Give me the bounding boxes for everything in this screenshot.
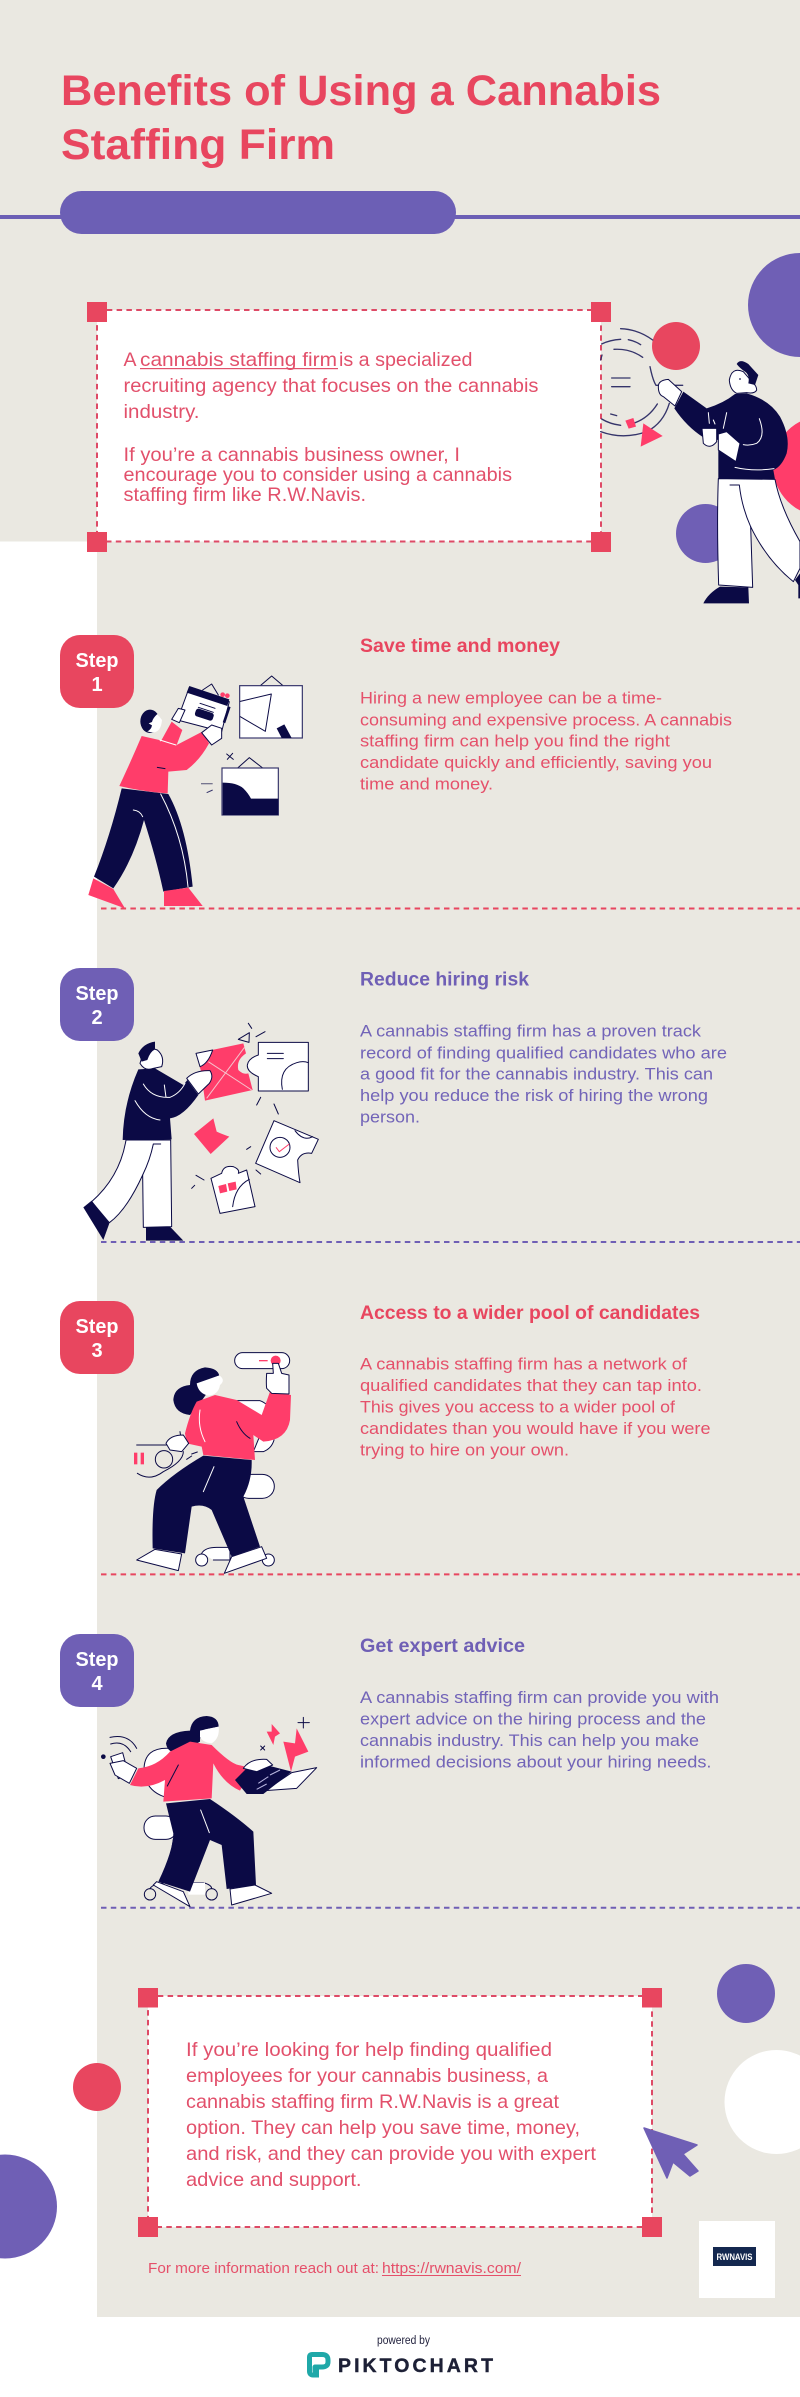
title xyxy=(61,67,661,169)
step 4 xyxy=(60,1634,719,1771)
step 1 badge: Step xyxy=(76,650,118,672)
step 1 xyxy=(60,635,732,793)
step 1 heading: Save time and money xyxy=(360,636,560,657)
step 2 body: a good fit for the cannabis industry. This can xyxy=(360,1064,713,1083)
icon: Piktochart mark xyxy=(310,2354,328,2375)
cup xyxy=(702,428,717,446)
illustration: man with puzzle pieces xyxy=(83,1023,318,1241)
step 2 body: help you reduce the risk of hiring the wrong xyxy=(360,1086,708,1105)
pants xyxy=(92,1140,172,1227)
step 3 badge: Step xyxy=(76,1316,118,1338)
phone hand xyxy=(110,1761,137,1783)
conclusion text: employees for your cannabis business, a xyxy=(186,2065,548,2087)
slider button xyxy=(235,1353,290,1369)
sweater xyxy=(674,392,788,479)
sweater xyxy=(123,1068,198,1140)
step 2 body: A cannabis staffing firm has a proven track xyxy=(360,1022,702,1040)
decorative circles: top right xyxy=(652,253,800,563)
logo: Piktochart: PIKTOCHART xyxy=(338,2355,493,2377)
footer contact line: https://rwnavis.com/ xyxy=(382,2260,522,2277)
footer contact line xyxy=(148,2260,522,2277)
desk and loop xyxy=(134,1432,197,1477)
step 2 badge xyxy=(60,968,134,1041)
step 1 body: consuming and expensive process. A cannabis xyxy=(360,710,732,729)
window held xyxy=(203,684,218,695)
step 2 body: person. xyxy=(360,1107,420,1126)
step 4 body: informed decisions about your hiring needs. xyxy=(360,1752,712,1771)
step 2 body: record of finding qualified candidates who are xyxy=(360,1043,727,1062)
chair xyxy=(196,1401,274,1566)
step 3 badge xyxy=(60,1301,134,1374)
step 4 body xyxy=(360,1688,719,1771)
step 1 badge xyxy=(60,635,134,708)
intro text: staffing firm like R.W.Navis. xyxy=(124,484,366,506)
laptop xyxy=(235,1759,317,1794)
head xyxy=(140,710,160,733)
panel: intro box xyxy=(87,302,611,552)
step 4 heading: Get expert advice xyxy=(360,1636,525,1657)
step 2 body xyxy=(360,1022,727,1126)
shoes xyxy=(88,878,125,908)
shoes xyxy=(703,587,749,603)
sweater xyxy=(119,722,209,793)
pants xyxy=(94,788,193,892)
step 4 badge: 4 xyxy=(91,1673,103,1695)
step 3 badge: 3 xyxy=(91,1340,103,1362)
icon: cursor arrow xyxy=(644,2128,698,2178)
step 3 heading: Access to a wider pool of candidates xyxy=(360,1303,700,1324)
step 1 body: time and money. xyxy=(360,774,493,793)
chair xyxy=(144,1748,217,1900)
trousers xyxy=(718,479,800,587)
intro text xyxy=(124,349,539,506)
step 1 badge: 1 xyxy=(91,674,103,696)
hand xyxy=(187,1071,212,1094)
title: Benefits of Using a Cannabis xyxy=(61,67,661,115)
hands xyxy=(202,725,222,745)
intro text: cannabis staffing firm xyxy=(140,349,337,371)
lightning and marks xyxy=(283,1728,308,1772)
pants xyxy=(158,1799,256,1892)
intro text: A xyxy=(124,349,137,371)
hands xyxy=(718,432,740,462)
step 1 body: staffing firm can help you find the right xyxy=(360,732,670,750)
face xyxy=(197,1375,223,1396)
powered by label: powered by xyxy=(377,2335,430,2347)
step 3 body: A cannabis staffing firm has a network of xyxy=(360,1354,687,1373)
conclusion text: and risk, and they can provide you with expert xyxy=(186,2143,597,2165)
conclusion text: If you’re looking for help finding qualified xyxy=(186,2039,552,2061)
diagram arcs xyxy=(601,329,683,436)
step 3 body: qualified candidates that they can tap into. xyxy=(360,1376,702,1395)
illustration: woman with phone and laptop xyxy=(101,1716,317,1907)
step 3 body: candidates than you would have if you were xyxy=(360,1419,710,1438)
step 1 body xyxy=(360,688,732,793)
conclusion text: cannabis staffing firm R.W.Navis is a great xyxy=(186,2091,560,2113)
intro text: If you’re a cannabis business owner, I xyxy=(124,444,460,466)
step 2 xyxy=(60,968,727,1126)
step 4 body: cannabis industry. This can help you make xyxy=(360,1731,699,1750)
panel: conclusion box xyxy=(138,1988,662,2237)
head xyxy=(729,370,757,393)
shoes xyxy=(153,1882,190,1907)
shoes xyxy=(83,1201,109,1240)
step 4 body: expert advice on the hiring process and the xyxy=(360,1710,706,1729)
head xyxy=(140,1049,163,1069)
hands xyxy=(266,1363,289,1394)
step 3 body xyxy=(360,1354,710,1459)
decorative circles: conclusion xyxy=(0,1964,800,2258)
conclusion text: advice and support. xyxy=(186,2169,362,2191)
illustration: man drawing diagram with cup xyxy=(601,329,800,603)
title divider pill xyxy=(0,191,800,234)
title: Staffing Firm xyxy=(61,121,335,169)
conclusion text: option. They can help you save time, money, xyxy=(186,2117,580,2139)
conclusion text xyxy=(186,2039,597,2191)
step 1 body: candidate quickly and efficiently, saving you xyxy=(360,753,712,772)
step 1 body: Hiring a new employee can be a time- xyxy=(360,688,662,708)
hair xyxy=(173,1367,219,1415)
intro text: encourage you to consider using a cannabis xyxy=(124,464,512,486)
step 3 body: This gives you access to a wider pool of xyxy=(360,1397,675,1416)
step 3 xyxy=(60,1301,710,1459)
step 4 badge xyxy=(60,1634,134,1707)
step 2 badge: 2 xyxy=(91,1007,103,1029)
step 2 heading: Reduce hiring risk xyxy=(360,970,529,990)
signal and phone xyxy=(101,1736,137,1779)
intro text: recruiting agency that focuses on the cannabis xyxy=(124,375,539,397)
intro text: industry. xyxy=(124,401,200,423)
sweater xyxy=(185,1392,291,1460)
puzzle pieces xyxy=(192,1023,318,1213)
step 2 badge: Step xyxy=(76,983,118,1005)
shoes xyxy=(137,1549,182,1571)
hair xyxy=(166,1716,219,1753)
intro text: is a specialized xyxy=(339,349,472,371)
illustration: man hanging pictures xyxy=(88,676,302,908)
face xyxy=(200,1727,219,1743)
pants xyxy=(152,1456,260,1557)
step 3 body: trying to hire on your own. xyxy=(360,1440,569,1459)
picture frames xyxy=(201,676,302,815)
footer contact line: For more information reach out at: xyxy=(148,2260,379,2277)
illustration: woman on chair pressing button xyxy=(134,1353,291,1573)
step 4 body: A cannabis staffing firm can provide you with xyxy=(360,1688,719,1707)
logo: RWNAVIS xyxy=(699,2221,775,2298)
logo: RWNAVIS: RWNAVIS xyxy=(716,2252,752,2262)
step 4 badge: Step xyxy=(76,1649,118,1671)
sweater xyxy=(130,1742,253,1802)
